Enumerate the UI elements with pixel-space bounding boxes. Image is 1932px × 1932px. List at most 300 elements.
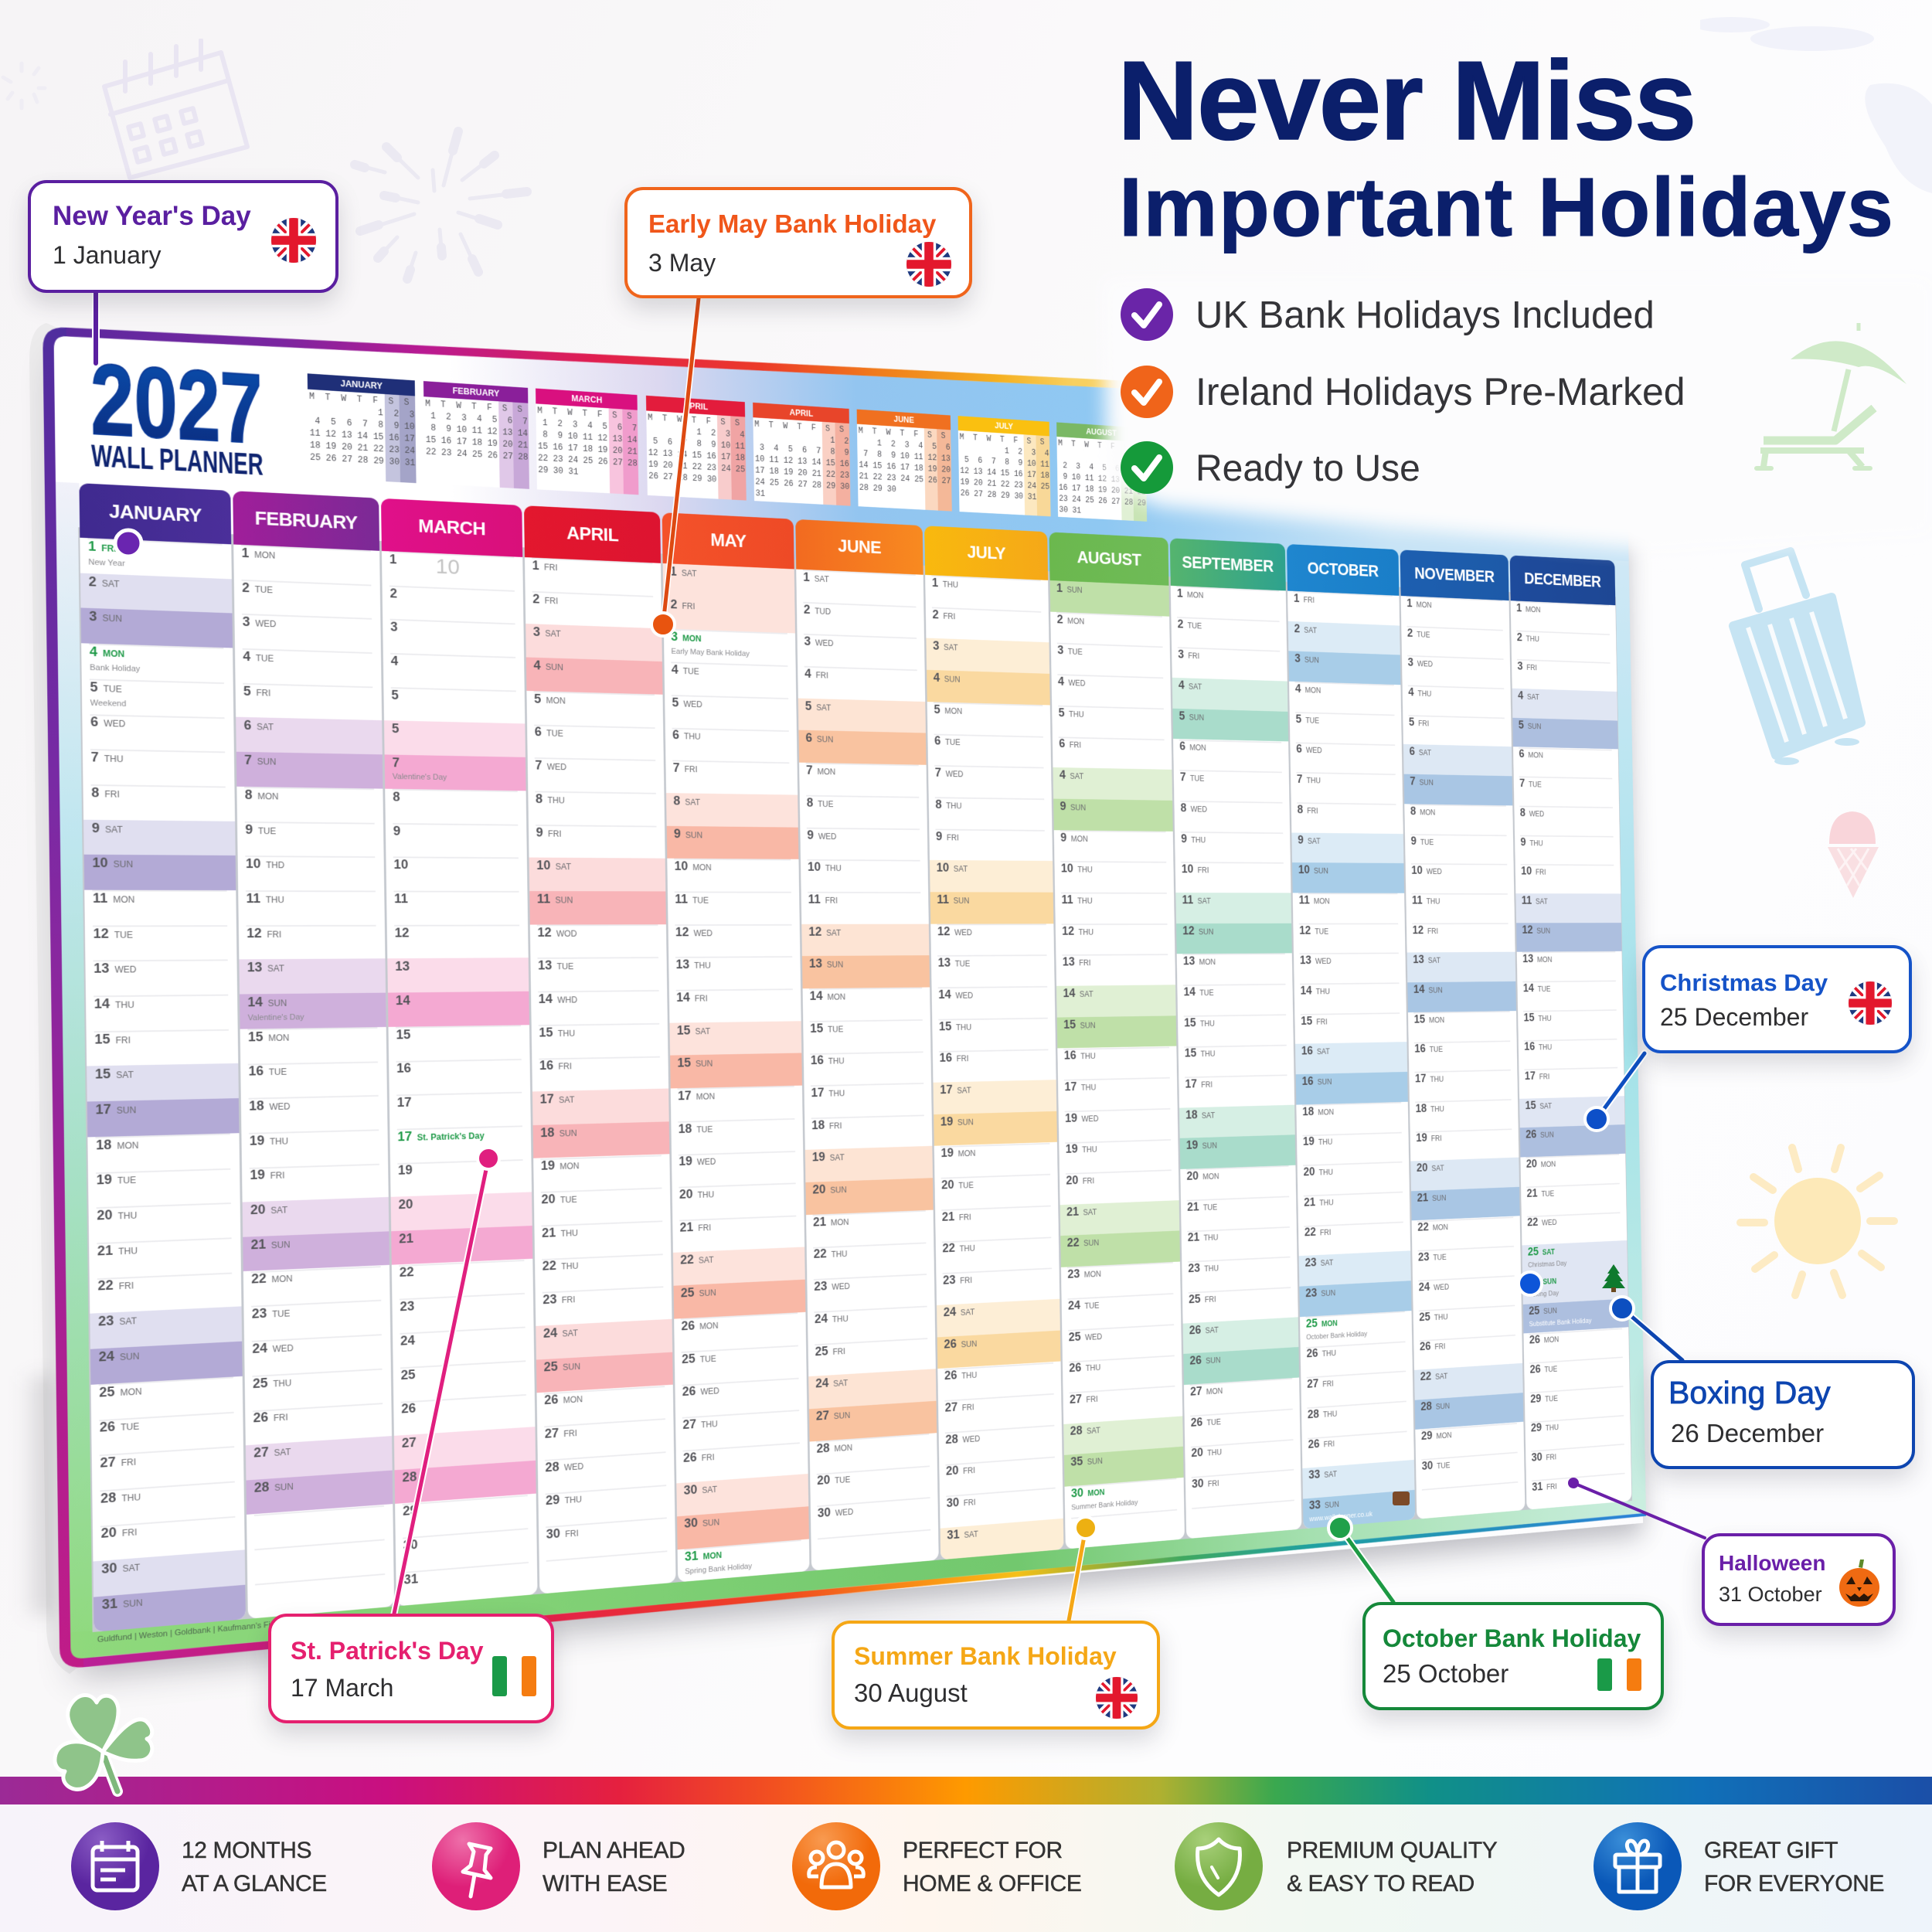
mini calendar: February	[423, 381, 529, 489]
day rows: January: 30 SAT	[101, 1560, 140, 1577]
feature: great gift for everyone: FOR EVERYONE	[1704, 1871, 1884, 1896]
feature: 12 months at a glance	[71, 1822, 327, 1910]
day rows: February: 18 WED	[249, 1098, 291, 1113]
decorative shapes: pale blobs top right	[1700, 17, 1932, 193]
mini calendar: January	[308, 373, 417, 483]
day rows: May: 15 SAT	[677, 1023, 710, 1037]
day rows: March: 12	[395, 925, 410, 940]
wall shadow left of board	[20, 1376, 53, 1615]
callout: Halloween: Halloween	[1719, 1551, 1825, 1575]
day rows: May: Spring Bank Holiday	[685, 1562, 752, 1576]
callout: October Bank Holiday: 25 October	[1383, 1659, 1509, 1688]
day rows: October: 33 SAT	[1308, 1468, 1337, 1481]
day rows: March	[381, 551, 537, 1606]
day rows: November: 2 TUE	[1407, 627, 1430, 639]
day rows: December: 6 MON	[1519, 748, 1543, 760]
callout: Summer Bank Holiday: Summer Bank Holiday	[854, 1642, 1117, 1670]
day rows: October: 20 THU	[1303, 1165, 1333, 1179]
callout: Early May Bank Holiday: Early May Bank Holiday	[648, 209, 936, 238]
day rows: October: 16 SUN	[1301, 1074, 1332, 1087]
day rows: December: 26 TUE	[1530, 1362, 1557, 1376]
month header: October: OCTOBER	[1308, 558, 1379, 580]
day rows: November: 21 SUN	[1417, 1191, 1446, 1204]
day rows: June: 7 MON	[806, 764, 835, 777]
day rows: June: 12 SAT	[808, 924, 841, 938]
day rows: September: 10 FRI	[1182, 862, 1209, 876]
day rows: March: 8	[393, 790, 400, 804]
day rows: January: 31 SUN	[102, 1596, 143, 1612]
heading line: Never Miss: Never Miss	[1117, 38, 1696, 163]
month header: April: APRIL	[566, 522, 618, 546]
day rows: April: 18 SUN	[540, 1125, 577, 1140]
day rows: May: 4 TUE	[672, 662, 699, 676]
day rows: August: 3 TUE	[1057, 644, 1083, 657]
day rows: January	[80, 538, 245, 1632]
panel: February	[233, 491, 394, 1618]
day rows: May: 30 SAT	[684, 1483, 717, 1498]
day rows: January: New Year	[88, 558, 125, 568]
day rows: April: 23 FRI	[543, 1292, 575, 1307]
day rows: November: 13 SAT	[1413, 953, 1440, 966]
day rows: August: 30 MON	[1071, 1486, 1105, 1500]
decorative icon: firework	[350, 127, 532, 284]
day rows: April: 14 WHD	[539, 992, 577, 1006]
day rows: February: 20 SAT	[250, 1202, 287, 1217]
day rows: April: 17 SAT	[539, 1092, 574, 1106]
day rows: May: 13 THU	[675, 957, 711, 971]
day rows: December: 4 SAT	[1518, 689, 1539, 702]
day rows: December: 22 WED	[1527, 1216, 1557, 1229]
day rows: November: 26 FRI	[1420, 1340, 1445, 1353]
icon: purple check	[1121, 288, 1173, 341]
day rows: June: 14 MON	[809, 989, 845, 1002]
day rows: November: 17 THU	[1415, 1072, 1444, 1085]
day rows: August: 21 SAT	[1066, 1205, 1097, 1218]
panel: September	[1170, 538, 1301, 1539]
day rows: April: 10 SAT	[536, 859, 571, 872]
day rows: May: 20 THU	[679, 1187, 714, 1202]
mini calendar: March	[536, 389, 638, 495]
day rows: December: 16 THU	[1524, 1040, 1552, 1053]
day rows: October: 16 SAT	[1301, 1044, 1330, 1057]
day rows: January: 13 WED	[94, 961, 137, 976]
callout: Christmas Day	[1642, 945, 1912, 1053]
day rows: November: 28 SUN	[1420, 1400, 1450, 1413]
day rows: September: 5 SUN	[1179, 709, 1204, 722]
month header: October	[1287, 544, 1399, 596]
day rows: April: 9 FRI	[536, 825, 562, 839]
day rows: December: 2 THU	[1517, 631, 1539, 643]
panel: March	[380, 498, 538, 1606]
day rows: September: 4 SAT	[1179, 679, 1202, 692]
day rows: January: 5 TUE	[90, 679, 122, 695]
day rows: September: 6 MON	[1179, 740, 1206, 753]
day rows: May: 19 WED	[679, 1155, 716, 1168]
day rows: July: 11 SUN	[937, 893, 969, 906]
day rows: April: 11 SUN	[537, 892, 573, 906]
day rows: February: 10 THD	[246, 856, 284, 871]
panel: November	[1400, 550, 1526, 1519]
day rows: April: 16 FRI	[539, 1059, 572, 1073]
day rows: August: 35 SUN	[1070, 1454, 1103, 1468]
mini calendar: April	[646, 396, 747, 501]
month header: February	[233, 491, 379, 551]
day rows: October: 7 THU	[1297, 773, 1321, 785]
day rows: December: 14 TUE	[1523, 981, 1551, 994]
day rows: May: 17 MON	[678, 1089, 715, 1103]
footer note on board: Guldfund | Weston | Goldbank | Kaufmann's Finale	[97, 1619, 286, 1645]
day rows: November: 10 WED	[1411, 864, 1442, 876]
day rows: September: 15 THU	[1185, 1046, 1216, 1060]
day rows: March: 5	[392, 722, 400, 736]
callout: October Bank Holiday: October Bank Holiday	[1383, 1624, 1641, 1652]
day rows: November: 24 WED	[1419, 1281, 1449, 1294]
day rows: March: 10	[436, 555, 460, 579]
day rows: June: 18 FRI	[811, 1118, 842, 1132]
day rows: January: 14 THU	[94, 996, 134, 1011]
day rows: February: 22 MON	[251, 1271, 293, 1287]
day rows: February: 14 SUN	[247, 995, 287, 1009]
day rows: September: 26 TUE	[1191, 1415, 1221, 1429]
board edge thickness	[29, 323, 77, 1674]
day rows: November: 15 MON	[1414, 1012, 1444, 1026]
day rows: August: 5 THU	[1059, 706, 1084, 719]
day rows: December: Boxing Day	[1529, 1290, 1559, 1298]
day rows: July: 5 MON	[934, 702, 962, 716]
day rows: October: 26 THU	[1306, 1346, 1336, 1360]
day rows: February: 19 THU	[250, 1133, 288, 1148]
day rows: September: 2 TUE	[1178, 617, 1202, 631]
day rows: March: 13	[395, 959, 410, 974]
month header: November	[1400, 549, 1509, 600]
callout: Halloween	[1702, 1533, 1896, 1626]
day rows: April: 26 MON	[544, 1393, 583, 1407]
day rows: July: 19 MON	[940, 1146, 976, 1160]
day rows: February: 12 FRI	[247, 926, 281, 940]
day rows: December: 21 TUE	[1526, 1187, 1554, 1199]
month header: July	[924, 526, 1048, 580]
day rows: March: 1	[389, 552, 396, 566]
day rows: August: 2 MON	[1057, 612, 1084, 626]
day rows: March: 28	[402, 1469, 417, 1485]
day rows: May: 26 MON	[681, 1318, 719, 1333]
day rows: August: 17 THU	[1064, 1080, 1096, 1094]
day rows: August: 4 WED	[1058, 675, 1086, 688]
day rows: August: 19 THU	[1066, 1142, 1097, 1156]
day rows: March: 17 St. Patrick's Day	[397, 1129, 485, 1144]
day rows: May: 5 WED	[672, 696, 702, 709]
callout: St. Patrick's Day	[268, 1614, 554, 1723]
day rows: April: 24 SAT	[543, 1325, 578, 1340]
day rows: July: 15 THU	[939, 1019, 971, 1032]
month header: September	[1169, 538, 1285, 590]
callout: St. Patrick's Day: St. Patrick's Day	[291, 1637, 484, 1665]
day rows: December: 29 TUE	[1530, 1392, 1558, 1405]
day rows: February: 27 SAT	[253, 1444, 291, 1460]
icon: orange check	[1121, 366, 1173, 418]
day rows: October: 2 SAT	[1294, 622, 1317, 634]
day rows: May: 25 SUN	[681, 1285, 716, 1300]
day rows: January: 24 SUN	[99, 1349, 140, 1364]
day rows: June: 24 THU	[815, 1311, 849, 1325]
day rows: June: 3 WED	[804, 634, 834, 648]
day rows: September: 23 THU	[1188, 1261, 1219, 1275]
day rows: October: 15 FRI	[1301, 1014, 1328, 1027]
day rows: October: 26 FRI	[1308, 1437, 1335, 1451]
day rows: August: 14 SAT	[1063, 986, 1094, 1000]
day rows: May: 27 THU	[682, 1417, 718, 1432]
day rows: October: 4 MON	[1295, 682, 1321, 695]
day rows: November: 23 TUE	[1418, 1250, 1447, 1264]
day rows: October: 5 TUE	[1296, 713, 1319, 725]
callout: Early May Bank Holiday: 3 May	[648, 249, 716, 277]
day rows: June: 15 TUE	[810, 1021, 843, 1035]
day rows: August: 9 MON	[1060, 831, 1088, 844]
title: 2027 Wall Planner: 2027	[90, 342, 269, 475]
day rows: June: 28 MON	[816, 1440, 852, 1455]
mini calendar: March: M T W T F S S 1 2 3 4 5 6 7 8 9 10 11 12 13 14 15 16 17 18 19 20 21 22 23 24 25 26 27 28 29 30 31	[537, 406, 638, 477]
day rows: July: 20 TUE	[941, 1178, 974, 1192]
mini calendar: January: JANUARY	[340, 379, 383, 391]
month header: September: SEPTEMBER	[1182, 553, 1274, 576]
decorative icon: ice cream	[1828, 811, 1879, 898]
day rows: February: 24 WED	[252, 1341, 294, 1356]
day rows: August: 12 THU	[1062, 924, 1094, 937]
day rows: June: 11 FRI	[808, 893, 838, 906]
day rows: October: 3 SUN	[1294, 652, 1319, 665]
day rows: August: 28 SAT	[1070, 1423, 1100, 1437]
day rows: November: 14 SUN	[1413, 983, 1443, 995]
feature: premium quality and easy to read: PREMIUM QUALITY	[1287, 1838, 1497, 1863]
day rows: September: 12 SUN	[1182, 923, 1213, 937]
day rows: June: 30 WED	[818, 1505, 853, 1520]
day rows: June: 22 THU	[814, 1247, 848, 1261]
day rows: November: 5 FRI	[1409, 716, 1429, 728]
month header: March	[380, 498, 522, 557]
footer background	[0, 1801, 1932, 1932]
day rows: April: 29 THU	[546, 1493, 582, 1508]
day rows: January: 9 SAT	[92, 820, 123, 835]
day rows: December: 17 FRI	[1525, 1070, 1549, 1082]
day rows: October: 23 SAT	[1304, 1256, 1333, 1269]
day rows: March: 26	[401, 1401, 416, 1416]
day rows: January: 18 MON	[96, 1137, 139, 1152]
day rows: July: 14 WED	[938, 988, 973, 1001]
callout: Early May Bank Holiday	[624, 187, 972, 298]
day rows: October	[1287, 591, 1415, 1529]
day rows: October: 11 MON	[1299, 893, 1330, 906]
panel: April	[524, 505, 675, 1594]
day rows: November: 19 FRI	[1416, 1131, 1442, 1145]
mini calendar: June	[857, 410, 952, 512]
day rows: March: 25	[401, 1367, 416, 1382]
day rows: October: 25 MON	[1306, 1316, 1338, 1330]
day rows: May: 12 WED	[675, 925, 713, 939]
day rows: February: 23 TUE	[252, 1306, 290, 1321]
day rows: February: 3 WED	[243, 614, 277, 629]
day rows: June: 2 TUD	[804, 602, 831, 616]
day rows: July: 17 SAT	[940, 1083, 971, 1097]
day rows: February	[233, 544, 394, 1619]
day rows: December	[1510, 600, 1631, 1510]
day rows: October: October Bank Holiday	[1306, 1330, 1367, 1341]
day rows: May: 25 TUE	[682, 1351, 716, 1366]
day rows: August: 11 THU	[1061, 893, 1093, 906]
day rows: November: 30 TUE	[1422, 1459, 1450, 1472]
day rows: June: 8 TUE	[807, 796, 834, 809]
day rows: July: 9 FRI	[936, 829, 959, 842]
day rows: June: 13 SUN	[809, 957, 843, 971]
day rows: June: 21 MON	[813, 1215, 849, 1229]
icon: Christmas tree	[1602, 1264, 1625, 1292]
day rows: March: 23	[400, 1299, 414, 1314]
day rows: March: 10	[393, 857, 408, 872]
month header: August	[1049, 532, 1168, 586]
feature: great gift for everyone	[1594, 1822, 1903, 1910]
day rows: September: 20 THU	[1191, 1446, 1222, 1460]
day rows: January: 3 SUN	[89, 609, 122, 624]
feature: 12 months at a glance: 12 MONTHS	[182, 1838, 311, 1863]
day rows: July	[925, 575, 1063, 1560]
day rows: August: 24 TUE	[1068, 1298, 1100, 1312]
day rows: September: 30 FRI	[1192, 1477, 1219, 1491]
icon: shamrock	[56, 1693, 150, 1797]
panel: June	[795, 519, 939, 1570]
day rows: January: 19 TUE	[97, 1172, 136, 1188]
day rows: May: 14 FRI	[676, 990, 708, 1004]
day rows: May: 30 SUN	[684, 1515, 719, 1530]
day rows: September: 19 SUN	[1186, 1138, 1217, 1151]
callout: New Year's Day: 1 January	[53, 241, 162, 269]
day rows: October: 14 THU	[1301, 984, 1330, 997]
day rows: November: 3 WED	[1408, 656, 1433, 668]
heading line: Important Holidays: Important Holidays	[1119, 160, 1894, 253]
day rows: February: 25 THU	[253, 1376, 291, 1390]
day rows: August	[1049, 580, 1185, 1549]
day rows: May: 6 THU	[672, 728, 701, 742]
day rows: August: 25 WED	[1069, 1329, 1102, 1343]
day rows: August: 1 SUN	[1056, 581, 1083, 595]
mini calendar: February: M T W T F S S 1 2 3 4 5 6 7 8 9 10 11 12 13 14 15 16 17 18 19 20 21 22 23 24 25 26 27 28	[425, 399, 529, 462]
day rows: November: 20 SAT	[1417, 1162, 1444, 1174]
mini calendar: February: FEBRUARY	[452, 386, 500, 399]
day rows: December: 29 THU	[1531, 1421, 1559, 1434]
day rows: August: 26 THU	[1069, 1361, 1100, 1375]
day rows: September: 18 SAT	[1185, 1108, 1215, 1121]
mini calendar: August: M T W T F S S 1 2 3 4 5 6 7 8 9 10 11 12 13 14 15 16 17 18 19 20 21 22 23 24 25 26 27 28 29 30 31	[1058, 439, 1146, 515]
day rows: September: 25 FRI	[1189, 1292, 1216, 1305]
day rows: September: 20 MON	[1186, 1169, 1219, 1182]
day rows: March: Valentine's Day	[393, 773, 447, 782]
day rows: June: 5 SAT	[805, 699, 831, 713]
day rows: January: 2 SAT	[89, 574, 120, 589]
day rows: January: 20 THU	[97, 1207, 137, 1223]
day rows: January: 17 SUN	[95, 1102, 136, 1117]
day rows: April: 2 FRI	[532, 591, 558, 606]
day rows: August: 27 FRI	[1070, 1392, 1098, 1406]
day rows: April: 12 WOD	[537, 925, 577, 939]
callout: Summer Bank Holiday	[832, 1621, 1160, 1730]
day rows: January: 10 SUN	[92, 855, 133, 870]
month header: February: FEBRUARY	[254, 507, 358, 533]
feature: plan ahead with ease: PLAN AHEAD	[543, 1838, 685, 1863]
day rows: January: Bank Holiday	[90, 663, 140, 674]
day rows: August: 9 SUN	[1060, 799, 1086, 812]
day rows: February: 26 FRI	[253, 1410, 288, 1425]
day rows: February: 16 TUE	[248, 1064, 287, 1079]
feature: premium quality and easy to read: & EASY TO READ	[1287, 1871, 1475, 1896]
day rows: May: 1 SAT	[670, 564, 697, 579]
day rows: June: 10 THU	[808, 860, 842, 874]
day rows: June: 16 THU	[811, 1053, 845, 1067]
day rows: October: 12 TUE	[1299, 923, 1328, 937]
day rows: April: 6 TUE	[535, 725, 563, 739]
day rows: February: 15 MON	[248, 1029, 289, 1044]
day rows: January: 28 THU	[100, 1490, 141, 1505]
day rows: October: 28 THU	[1308, 1407, 1337, 1420]
day rows: January: 1 FRI	[88, 539, 117, 554]
decorative icon: sun	[1736, 1144, 1898, 1299]
day rows: July: 26 SUN	[944, 1337, 977, 1351]
day rows: November: 12 FRI	[1413, 923, 1438, 936]
day rows: January: 6 WED	[90, 715, 125, 730]
day rows: December: 15 SAT	[1525, 1099, 1552, 1111]
day rows: October: 22 FRI	[1304, 1226, 1331, 1239]
day rows: October: 13 WED	[1300, 954, 1332, 967]
day rows: July: 7 WED	[935, 766, 964, 779]
day rows: January: 7 THU	[91, 750, 124, 764]
day rows: November: 4 THU	[1408, 685, 1431, 699]
day rows: April	[524, 557, 675, 1594]
mini calendar: July: M T W T F S S 1 2 3 4 5 6 7 8 9 10 11 12 13 14 15 16 17 18 19 20 21 22 23 24 25 26 27 28 29 30 31	[960, 433, 1049, 502]
day rows: August: 15 SUN	[1063, 1018, 1096, 1031]
day rows: August: 19 WED	[1065, 1111, 1099, 1124]
day rows: December: 31 FRI	[1532, 1480, 1557, 1493]
callout: Summer Bank Holiday: 30 August	[854, 1679, 968, 1707]
day rows: January: 26 TUE	[100, 1419, 139, 1435]
day rows: March: 15	[396, 1027, 410, 1042]
day rows: November: 25 THU	[1419, 1310, 1448, 1323]
day rows: June: 27 SUN	[816, 1408, 850, 1423]
day rows: July: 4 SUN	[934, 671, 961, 684]
day rows: March: 22	[400, 1265, 414, 1280]
panel: wall planner board	[40, 327, 1657, 1692]
day rows: May: 21 FRI	[679, 1220, 711, 1234]
day rows: January: 22 FRI	[97, 1278, 134, 1294]
day rows: January: 27 FRI	[100, 1454, 136, 1470]
day rows: March: 11	[394, 891, 408, 906]
day rows: May	[662, 563, 809, 1582]
day rows: November: 29 MON	[1421, 1429, 1452, 1443]
day rows: October: 8 FRI	[1298, 803, 1318, 815]
panel: May	[662, 512, 810, 1582]
day rows: December: 9 THU	[1520, 835, 1543, 848]
day rows: January: 15 FRI	[94, 1032, 131, 1046]
day rows: April: 25 SUN	[543, 1359, 580, 1374]
day rows: December: 10 FRI	[1521, 865, 1546, 877]
feature: plan ahead with ease	[432, 1822, 685, 1910]
day rows: July: 28 WED	[945, 1432, 980, 1446]
decorative icon: beach chair and umbrella	[1754, 323, 1906, 471]
day rows: September: 3 FRI	[1178, 648, 1199, 661]
day rows: March: 29	[403, 1503, 417, 1519]
day rows: July: 21 FRI	[942, 1209, 971, 1223]
day rows: June: 4 FRI	[804, 667, 828, 680]
text: UK Bank Holidays Included: UK Bank Holidays Included	[1196, 294, 1655, 336]
day rows: September: 26 SUN	[1189, 1354, 1221, 1367]
callout: Christmas Day: Christmas Day	[1660, 969, 1828, 996]
month header: May: MAY	[710, 529, 747, 551]
